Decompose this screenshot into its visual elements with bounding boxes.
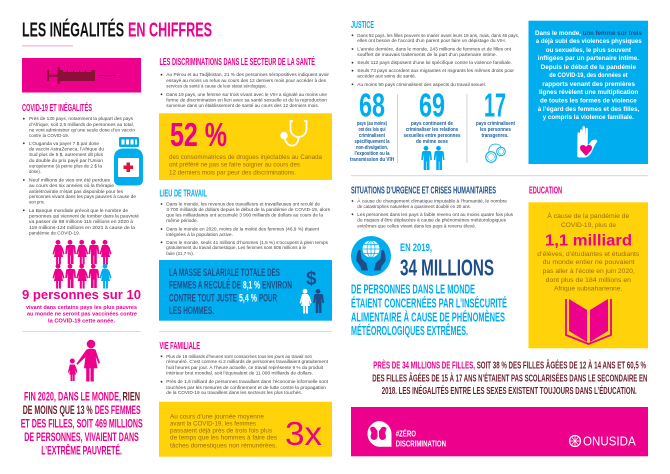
stat: 17 countries: transgenres.: [482, 133, 509, 139]
big number: 52 %: 52 %: [170, 116, 227, 153]
text block: family bullets: huit heures par jour. À l’heure actuelle, ce travail représente 9 % du produit: [166, 364, 324, 371]
text: violence statement: rapports venant des premières: [542, 81, 635, 88]
text: violence statement: à l’égard des femmes et des filles,: [538, 106, 640, 113]
icon: open book: [566, 299, 611, 344]
text block: covid bullets: La Banque mondiale prévoit que le nombre de: [29, 208, 128, 214]
text block: workplace bullets: faire (21,7 %).: [166, 251, 194, 257]
text block: workplace bullets: que les milliardaires ont accumulé 3 900 milliards de dollars au cours de la: [166, 212, 323, 218]
text block: extreme poverty: L’EXTRÊME PAUVRETÉ.: [41, 444, 122, 457]
text block: workplace bullets: gratuitement du travail domestique. Les femmes sont 606 millions à le: [166, 245, 306, 251]
text: violence statement: Dans le monde,: [535, 30, 581, 37]
text: violence statement: de toutes les formes de violence: [540, 98, 637, 104]
text block: covid bullets: contre la COVID-19.: [29, 133, 69, 139]
stat: 17 countries: pays criminalisent: [476, 121, 515, 127]
big number: 3x: 3x: [285, 415, 323, 452]
text block: covid bullets: du double du prix payé par l’Union: [29, 158, 103, 164]
logo: onusida: ONUSIDA: [583, 435, 636, 449]
text: education statement: COVID-19, plus de: [561, 222, 616, 229]
text block: extreme poverty: ET DES FILLES, SOIT 469 MILLIONS: [21, 418, 143, 430]
callout: 9 personnes sur 10: la COVID-19 cette année.: [48, 318, 116, 324]
icon: syringe: [47, 67, 116, 84]
text: 52 percent caption: des consommatrices de drogues injectables au Canada: [169, 154, 322, 161]
big number: 1,1 milliard: 1,1 milliard: [545, 233, 632, 250]
text: violence statement: une femme sur trois: [583, 30, 642, 37]
text block: girls out of school: [372, 359, 647, 397]
stat: 68 countries: spécifiquement la: [354, 139, 390, 145]
text block: covid bullets: au cours des six années où la thérapie: [29, 183, 114, 189]
text block: health bullets: essayé au moins un refus au cours des 12 derniers mois pour accéder à des: [166, 78, 327, 84]
text block: workplace bullets: Dans le monde, les revenus des travailleurs et travailleuses ont reculé de: [166, 202, 320, 208]
text block: extreme poverty: DE PERSONNES, VIVAIENT DANS: [24, 432, 139, 444]
stat: 68 countries: pays (au moins): [357, 121, 387, 127]
heading: family life: VIE FAMILIALE: [160, 341, 200, 352]
text block: family bullets: touchées par les mesures de confinement et de lutte contre la propagation: [166, 385, 326, 391]
text block: justice bullets: accéder aux soins de santé.: [357, 74, 416, 80]
callout: 34 million: 34 MILLIONS: [400, 255, 494, 281]
stat: 69 countries: [404, 87, 461, 170]
icon: woman and man: [300, 289, 324, 314]
text: education statement: À cause de la pandémie de: [547, 211, 630, 220]
stat: 69 countries: de même sexe: [416, 139, 448, 145]
text: unpaid work caption: tâches domestiques non rémunérées.: [170, 442, 277, 449]
title: EN CHIFFRES: [128, 20, 212, 42]
text: zero discrimination: #ZÉRO: [396, 429, 416, 439]
text: food insecurity statement: ÉTAIENT CONCERNÉES PAR L’INSÉCURITÉ: [351, 295, 507, 310]
text block: health bullets: forme de discrimination en lien avec sa santé sexuelle et de la reproduction: [166, 98, 327, 104]
text: education statement: du monde entier ne pouvaient: [543, 259, 635, 266]
text block: emergency bullets: de risques d’être déplacées à cause de phénomènes météorologiques: [357, 218, 507, 224]
text block: covid bullets: européenne (à peine plus de 2 $ la: [29, 164, 102, 170]
text block: family bullets: rémunéré. C’est comme si 2 milliards de personnes travaillaient gratuitement: [166, 359, 329, 365]
icon: medicine vial: [114, 137, 143, 186]
text: education statement: [537, 211, 640, 292]
icon: hands holding globe: [351, 236, 391, 276]
text: violence statement: a déjà subi des violences physiques: [536, 38, 642, 45]
stat: 68 countries: ont des lois qui: [358, 127, 386, 133]
text block: justice bullets: Seuls 112 pays disposent d’une loi spécifique contre la violence familiale.: [357, 60, 512, 66]
text block: covid bullets: antirétrovirale n’était pas disponible pour les: [29, 189, 124, 195]
text block: justice bullets: souffert de mauvais traitements de la part d’un partenaire intime.: [357, 52, 497, 58]
icon: stethoscope: [281, 121, 306, 146]
text block: emergency bullets: [352, 198, 514, 230]
text: education statement: pas aller à l’école en juin 2020,: [543, 268, 635, 275]
icon: handcuffs: [486, 144, 505, 162]
text: food insecurity statement: MÉTÉOROLOGIQUES EXTRÊMES.: [351, 323, 468, 338]
callout: 9 personnes sur 10: vivant dans certains pays les plus pauvres: [26, 305, 137, 311]
heading: education: EDUCATION: [529, 186, 562, 197]
stat: 68 countries: [350, 87, 394, 163]
text block: emergency bullets: de catastrophes naturelles a quasiment doublé en 20 ans.: [357, 204, 471, 210]
text: violence statement: [535, 30, 642, 121]
panel: syringe banner: [22, 58, 141, 92]
text block: covid bullets: personnes qui viennent de tomber dans la pauvreté: [29, 214, 139, 220]
text: education statement: d’élèves, d’étudiantes et étudiants: [537, 251, 640, 258]
text block: covid bullets: Près de 130 pays, notamment la plupart des pays: [29, 116, 134, 122]
stat: 68 countries: 68: [359, 87, 385, 124]
callout: 34 million: [351, 242, 507, 338]
text: unpaid work caption: [170, 413, 278, 449]
text block: covid bullets: ne vont administrer qu’une seule dose d’un vaccin: [29, 128, 135, 134]
heading: workplace: LIEU DE TRAVAIL: [160, 189, 207, 200]
stat: 69 countries: 69: [419, 87, 445, 124]
text: education statement: Afrique subsaharienne.: [554, 286, 622, 292]
stat: 69 countries: sexuelles entre personnes: [404, 133, 461, 139]
text block: workplace bullets: Dans le monde, seuls 41 millions d’hommes (1,5 %) s’occupent à plein temps: [166, 240, 329, 246]
text block: extreme poverty: DE MOINS QUE 13 %: [23, 405, 93, 417]
icon: dollar sign: $: [306, 268, 317, 290]
text: unpaid work caption: passaient déjà près de trois fois plus: [170, 427, 273, 434]
text: food insecurity statement: [351, 281, 507, 338]
icon: two men: [421, 146, 444, 170]
text: violence statement: infligées par un partenaire intime.: [538, 55, 639, 62]
text: wage bill statement: LA MASSE SALARIALE TOTALE DES: [169, 267, 280, 279]
text: violence statement: lignes révèlent une multiplication: [539, 89, 638, 96]
heading: discrimination in health: LES DISCRIMINATIONS DANS LE SECTEUR DE LA SANTÉ: [160, 55, 315, 68]
heading: emergencies: SITUATIONS D’URGENCE ET CRISES HUMANITAIRES: [351, 186, 496, 197]
text block: family bullets: [161, 354, 329, 396]
text: wage bill statement: FEMMES A RECULÉ DE: [169, 279, 241, 292]
text block: health bullets: [161, 72, 329, 109]
text block: covid bullets: 119 millions-124 millions en 2021 à cause de la: [29, 225, 135, 231]
callout: 9 personnes sur 10: [22, 287, 141, 324]
text block: covid bullets: personnes vivant dans les pays pauvres à cause de: [29, 194, 136, 200]
stat: 68 countries: l’exposition ou la: [354, 151, 390, 157]
callout: 9 personnes sur 10: au monde ne seront pas vaccinées contre: [27, 312, 137, 318]
icon: hand with heart: [577, 126, 597, 158]
text block: extreme poverty: RIEN: [122, 392, 140, 404]
text: 52 percent caption: 12 derniers mois par peur des discriminations.: [169, 169, 296, 176]
text block: family bullets: intérieur brut mondial, soit l’équivalent de 11 000 milliards de dollars.: [166, 370, 313, 376]
text block: workplace bullets: [161, 202, 331, 257]
stat: 68 countries: criminalisent: [359, 133, 385, 139]
text block: justice bullets: Seuls 73 pays accordent aux migrantes et migrants les mêmes droits pour: [357, 68, 514, 74]
text block: workplace bullets: 3 700 milliards de dollars depuis le début de la pandémie de COVID-19, alors: [166, 207, 331, 213]
text: wage bill statement: CONTRE TOUT JUSTE: [169, 292, 237, 304]
text: violence statement: y compris la violence familiale.: [543, 114, 634, 121]
panel: education: [528, 202, 648, 348]
text block: girls out of school: PRÈS DE 34 MILLIONS DE FILLES,: [373, 359, 475, 371]
text block: justice bullets: [352, 33, 519, 88]
text block: extreme poverty: DES FEMMES: [95, 405, 141, 417]
callout: 34 million: EN 2019,: [400, 242, 432, 254]
text block: workplace bullets: intégrées à la population active.: [166, 232, 233, 238]
text: unpaid work caption: Au cours d’une journée moyenne: [170, 413, 264, 420]
text: wage bill statement: 8,1 %: [243, 280, 260, 292]
text block: covid bullets: d’Afrique, soit 2,5 milliards de personnes au total,: [29, 122, 134, 128]
stat: 69 countries: pays continuent de: [411, 121, 453, 127]
text block: justice bullets: L’année dernière, dans le monde, 243 millions de femmes et de filles ont: [357, 46, 512, 52]
text: food insecurity statement: ALIMENTAIRE À CAUSE DE PHÉNOMÈNES: [351, 309, 505, 324]
text block: covid bullets: va passer de 88 millions-115 millions en 2020 à: [29, 219, 133, 225]
icon: mother and child: [68, 340, 100, 382]
text: education statement: dont plus de 184 millions en: [546, 277, 631, 284]
text block: covid bullets: dose).: [29, 169, 41, 175]
text block: emergency bullets: extrêmes que celles vivant dans les pays à revenu élevé.: [357, 224, 476, 230]
text block: covid bullets: son prix.: [29, 200, 45, 206]
text: unpaid work caption: avant la COVID-19, les femmes: [170, 420, 257, 427]
text block: workplace bullets: même période.: [166, 218, 198, 224]
text block: justice bullets: Dans 92 pays, les filles peuvent se marier avant leurs 18 ans, mais, dans 46 pays,: [357, 33, 519, 39]
text block: health bullets: Au Pérou et au Tadjikistan, 21 % des personnes séropositives indiquent avoir: [166, 72, 329, 78]
text block: workplace bullets: Dans le monde en 2020, moins de la moitié des femmes (46,9 %) étaient: [166, 226, 320, 232]
stat: 69 countries: criminaliser les relations: [406, 127, 458, 133]
panel: violence against women: [528, 21, 648, 164]
stat: 17 countries: [476, 87, 515, 162]
text block: health bullets: services de santé à cause de leur statut sérologique.: [166, 84, 267, 90]
text: 52 percent caption: [169, 154, 322, 176]
text block: justice bullets: Au moins 90 pays criminalisent des aspects du travail sexuel.: [357, 82, 486, 88]
text: wage bill statement: ENVIRON: [262, 280, 292, 292]
panel: unpaid work 3x: [159, 402, 332, 457]
text block: extreme poverty: [21, 392, 143, 457]
panel: wage bill: [159, 260, 332, 321]
heading: covid: COVID-19 ET INÉGALITÉS: [22, 101, 92, 114]
panel: footer banner: [351, 407, 648, 456]
text block: family bullets: Près de 1,6 milliard de personnes travaillant dans l’économie informelle sont: [166, 379, 329, 385]
panel: 52 percent: [159, 113, 332, 180]
callout: 9 personnes sur 10: 9 personnes sur 10: [22, 287, 141, 302]
stat: 17 countries: 17: [484, 87, 506, 124]
text block: covid bullets: Neuf millions de vies ont été perdues: [29, 178, 111, 184]
heading: justice: JUSTICE: [351, 20, 374, 31]
text: food insecurity statement: DE PERSONNES DANS LE MONDE: [351, 281, 475, 296]
text: violence statement: Depuis le début de la pandémie: [541, 64, 637, 71]
text: unpaid work caption: de temps que les hommes à faire des: [170, 435, 278, 442]
text: zero discrimination: [396, 429, 446, 449]
text: wage bill statement: POUR: [259, 292, 277, 304]
text block: family bullets: de la COVID-19 ou travaillent dans les secteurs les plus touchés.: [166, 390, 302, 396]
text block: covid bullets: de vaccin AstraZeneca, l’Afrique du: [29, 146, 104, 152]
text block: covid bullets: L’Ouganda va payer 7 $ par dose: [29, 141, 99, 147]
text block: emergency bullets: À cause du changement climatique imputable à l’humanité, le nombre: [357, 198, 507, 204]
text block: covid bullets: [23, 116, 139, 236]
text block: emergency bullets: Les personnes dans les pays à faible revenu ont au moins quatre fois plus: [357, 212, 514, 218]
text: violence statement: ou sexuelles, le plus souvent: [546, 47, 632, 54]
text: wage bill statement: [169, 267, 292, 317]
text: violence statement: de COVID-19, des données et: [549, 72, 628, 79]
stat: 68 countries: non-divulgation,: [356, 145, 388, 151]
text block: health bullets: Dans 19 pays, une femme sur trois vivant avec le VIH a signalé au moins une: [166, 92, 327, 98]
text: 52 percent caption: ont préféré ne pas se faire soigner au cours des: [169, 162, 301, 169]
text: wage bill statement: 5,4 %: [239, 292, 257, 304]
title: LES INÉGALITÉS: [22, 19, 124, 42]
icon: butterfly bubble: [367, 421, 392, 447]
text block: covid bullets: Sud plus de 5 $, autrement dit plus: [29, 152, 104, 158]
text: wage bill statement: LES HOMMES.: [169, 305, 214, 317]
text block: extreme poverty: FIN 2020, DANS LE MONDE,: [24, 392, 121, 404]
text block: health bullets: survenue dans un établissement de santé au cours des 12 derniers mois.: [166, 103, 319, 109]
text block: covid bullets: pandémie de COVID-19.: [29, 230, 80, 236]
stat: 17 countries: les personnes: [480, 127, 511, 133]
stat: 68 countries: transmission du VIH: [350, 157, 394, 163]
text block: justice bullets: elles ont besoin de l’accord d’un parent pour faire un dépistage du VIH.: [357, 38, 506, 44]
icon: nine of ten people: [52, 240, 112, 288]
text block: family bullets: Plus de 16 milliards d’heures sont consacrées tous les jours au travail non: [166, 354, 312, 360]
text: zero discrimination: DISCRIMINATION: [396, 439, 446, 449]
